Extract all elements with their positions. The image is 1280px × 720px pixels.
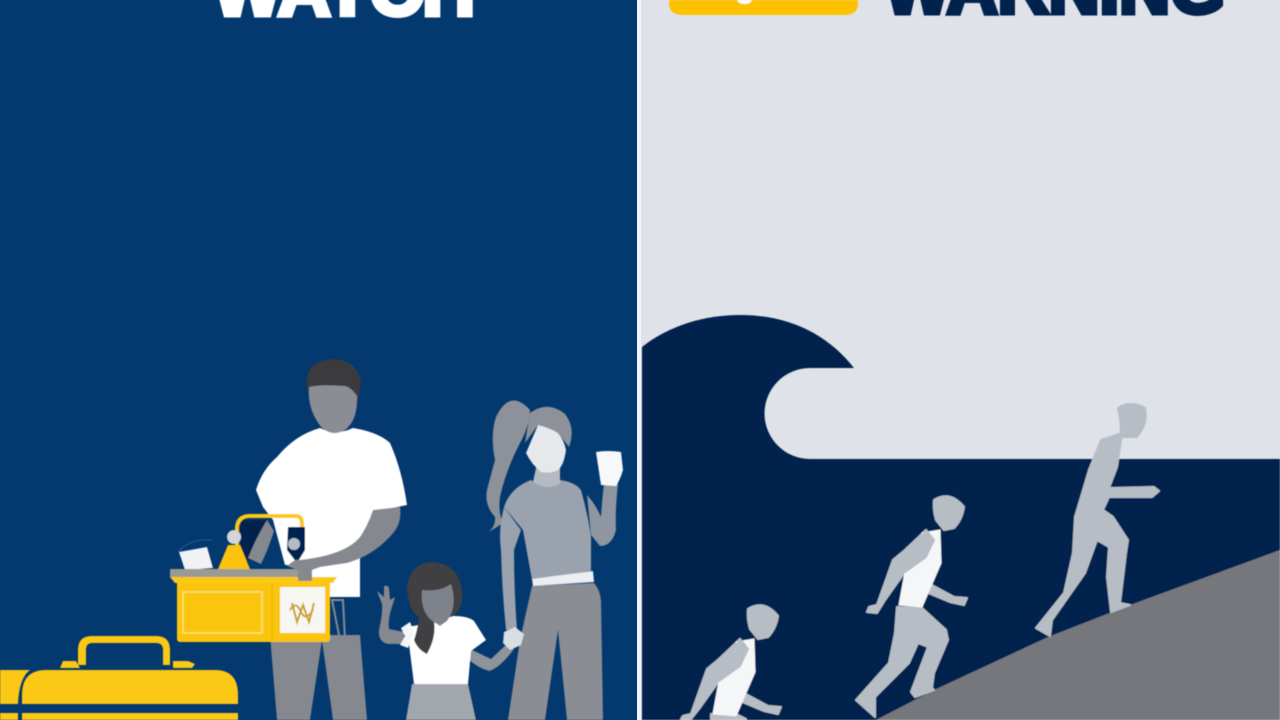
child pants bbox=[406, 684, 476, 720]
person: child bbox=[377, 562, 514, 720]
runner: middle bbox=[856, 496, 967, 717]
mother arm holding hand bbox=[500, 507, 521, 630]
kit body bbox=[177, 580, 330, 642]
runner: front bbox=[1036, 404, 1159, 636]
scrunchie bbox=[400, 622, 414, 648]
head bbox=[309, 385, 357, 433]
child face bbox=[422, 584, 454, 626]
person: mother bbox=[486, 401, 623, 720]
mother torso bbox=[504, 480, 591, 580]
child hair bbox=[407, 562, 462, 654]
kit label bbox=[280, 587, 325, 633]
neck bbox=[533, 468, 560, 487]
runner arms bbox=[681, 639, 740, 719]
strap bbox=[332, 600, 345, 640]
papers bbox=[179, 547, 213, 570]
runner body bbox=[1036, 433, 1159, 636]
tsunami wave bbox=[642, 315, 1280, 720]
belt bbox=[532, 571, 594, 586]
runner head bbox=[934, 496, 964, 530]
radio bbox=[287, 527, 305, 563]
mother pants bbox=[508, 583, 603, 720]
runner head bbox=[1118, 404, 1146, 437]
ponytail bbox=[486, 401, 530, 532]
hillside slope bbox=[876, 550, 1280, 720]
bottle bbox=[227, 530, 241, 544]
kit rim bbox=[170, 569, 337, 583]
arm: right bbox=[287, 507, 400, 581]
mother hair bbox=[525, 407, 572, 447]
panel: warning background bbox=[641, 0, 1280, 720]
warning badge bbox=[669, 0, 858, 15]
divider bbox=[637, 0, 641, 720]
clasped hands bbox=[503, 627, 524, 650]
shirt bbox=[256, 428, 407, 597]
runner: rear bbox=[681, 605, 781, 719]
runner head bbox=[748, 605, 778, 639]
mother arm raised bbox=[587, 484, 618, 546]
runner legs bbox=[711, 714, 746, 719]
mother face bbox=[526, 425, 566, 473]
cup bbox=[596, 451, 623, 486]
runner shirt bbox=[713, 639, 755, 716]
kit handle bbox=[237, 516, 302, 560]
runner shoulder bbox=[719, 639, 748, 681]
child arm holding hand bbox=[468, 641, 514, 671]
arm: left bbox=[248, 520, 274, 564]
panel: watch background bbox=[0, 0, 637, 720]
dark item bbox=[240, 520, 268, 560]
runner arms bbox=[867, 530, 926, 613]
first aid kit bbox=[170, 516, 337, 642]
child shirt bbox=[401, 616, 486, 684]
hair bbox=[307, 359, 361, 400]
runner shirt bbox=[899, 530, 941, 607]
child raised arm bbox=[377, 586, 404, 644]
person: father bbox=[170, 359, 407, 720]
suitcase bbox=[0, 636, 238, 720]
runner legs bbox=[856, 607, 948, 717]
legs bbox=[270, 635, 367, 720]
kit pocket bbox=[183, 592, 262, 633]
runner shoulder bbox=[905, 530, 934, 572]
